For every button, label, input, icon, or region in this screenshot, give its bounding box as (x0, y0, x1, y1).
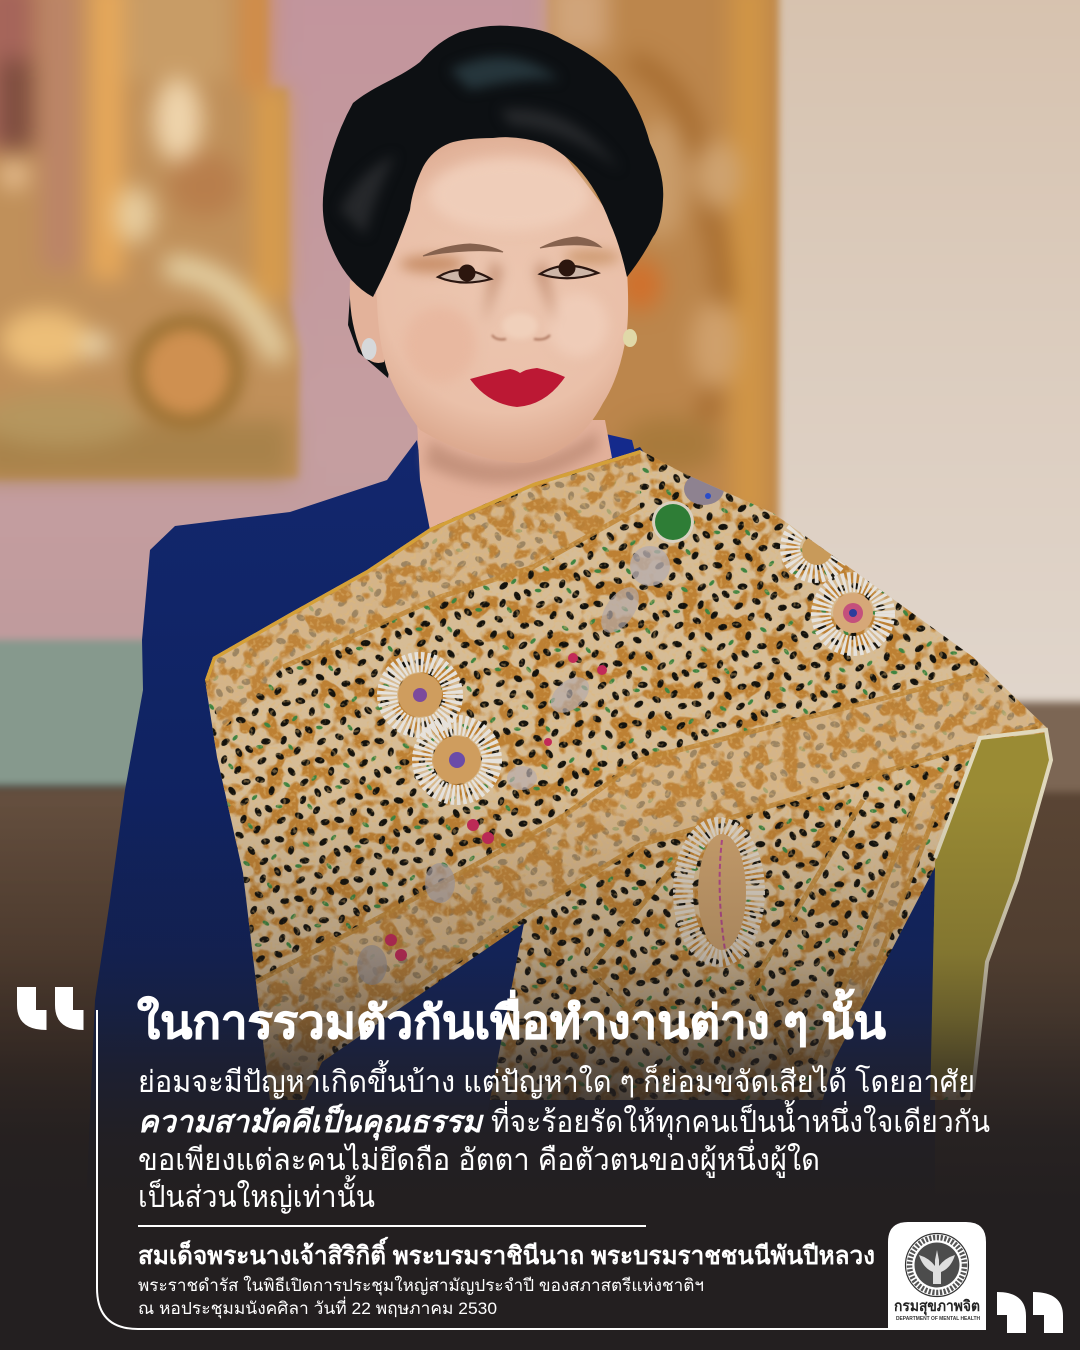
source text: ณ หอประชุมมนังคศิลา วันที่ 22 พฤษภาคม 2530 (138, 1296, 497, 1319)
shawl: olive lining (930, 733, 1050, 1090)
signature: สมเด็จพระนางเจ้าสิริกิติ์ พระบรมราชินีนาถ พระบรมราชชนนีพันปีหลวง (138, 1236, 875, 1270)
body text: ความสามัคคีเป็นคุณธรรม (138, 1103, 484, 1141)
face (372, 130, 628, 463)
shawl: bead glints (190, 430, 1070, 1110)
shawl: gold embroidered (190, 430, 1070, 1110)
dress: gap between panels (300, 923, 524, 1110)
ear (350, 280, 392, 363)
shawl: gold bead edge (205, 450, 640, 680)
floor: dark wood left (0, 788, 180, 1350)
source text: พระราชดำรัส ในพิธีเปิดการประชุมใหญ่สามัญประจำปี ของสภาสตรีแห่งชาติฯ (138, 1275, 704, 1296)
quote mark: closing (997, 1292, 1063, 1333)
shawl: orange mottling (190, 430, 1070, 1110)
band: teal dado (0, 640, 180, 786)
body text (138, 1060, 990, 1214)
wall: beige right (779, 0, 1080, 702)
earrings (362, 329, 637, 360)
shawl: lining edge (935, 730, 1051, 1090)
dress: right collar (597, 432, 636, 470)
dress: right gap (820, 867, 935, 1110)
logo: department of mental health: กรมสุขภาพจิต (894, 1297, 980, 1316)
neck shadow (425, 430, 598, 484)
source text (138, 1275, 704, 1319)
shawl: medallion flowers (357, 473, 885, 985)
nose (492, 313, 550, 340)
dress: navy (85, 440, 935, 1230)
lips (470, 368, 565, 407)
frame: gold right (548, 0, 780, 520)
shawl: panel lines (250, 507, 1040, 1080)
frame line (97, 1010, 888, 1329)
divider (138, 1225, 646, 1227)
neck (417, 420, 612, 530)
hair (323, 26, 663, 297)
heading: ในการรวมตัวกันเพื่อทำงานต่าง ๆ นั้น (137, 988, 887, 1048)
photo fade overlay (0, 790, 1080, 1200)
portrait figure (323, 26, 663, 530)
logo: department of mental health: DEPARTMENT OF MENTAL HEALTH (896, 1316, 980, 1322)
hair: rear (348, 295, 400, 378)
logo: department of mental health (888, 1222, 986, 1330)
body text: ที่จะร้อยรัดให้ทุกคนเป็นน้ำหนึ่งใจเดียวกัน (491, 1100, 990, 1141)
body text: ย่อมจะมีปัญหาเกิดขึ้นบ้าง แต่ปัญหาใด ๆ ก็ย่อมขจัดเสียได้ โดยอาศัย (138, 1060, 975, 1099)
floor: dark wood right (890, 702, 1080, 1350)
hair sheen (340, 57, 620, 235)
body text: ขอเพียงแต่ละคนไม่ยึดถือ อัตตา คือตัวตนของผู้หนึ่งผู้ใด (138, 1139, 820, 1178)
shawl: borders (205, 454, 1038, 1092)
eyes (438, 260, 598, 283)
shawl: flecks (190, 430, 1070, 1110)
frame: gold left (0, 0, 300, 480)
quote mark: opening (17, 987, 84, 1030)
face shading (400, 159, 620, 383)
body text: เป็นส่วนใหญ่เท่านั้น (138, 1175, 375, 1214)
wall: pink (0, 0, 800, 660)
eyebrows (423, 237, 601, 256)
